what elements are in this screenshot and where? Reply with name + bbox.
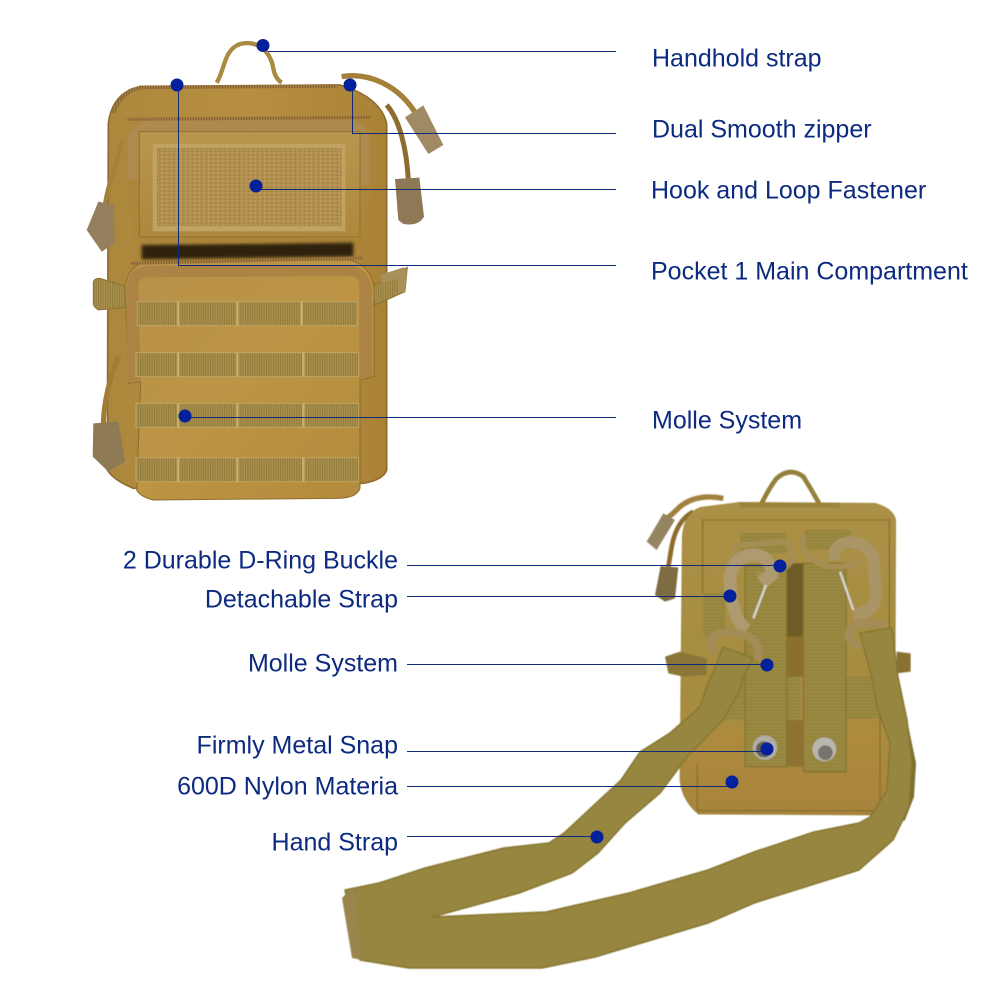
back view of pouch with strap — [342, 472, 916, 968]
side webbing loops — [93, 267, 407, 310]
callout: 600D nylon material — [177, 772, 738, 800]
callout: D-ring buckle: 2 Durable D-Ring Buckle — [123, 546, 398, 574]
hand strap — [345, 628, 912, 968]
hook and loop patch — [153, 144, 345, 231]
upper pocket with hook and loop panel — [125, 117, 372, 242]
center gap between belt straps — [787, 563, 803, 767]
strap slider buckle — [342, 887, 362, 960]
front view of pouch — [87, 43, 443, 500]
callout: firmly metal snap: Firmly Metal Snap — [197, 732, 398, 760]
callout: hook and loop fastener — [250, 176, 926, 204]
callout: handhold strap: Handhold strap — [652, 44, 822, 72]
callout: dual smooth zipper — [344, 78, 872, 144]
callout: hand strap — [272, 828, 604, 856]
back zipper pulls — [647, 497, 723, 602]
callout: molle system front — [178, 406, 802, 434]
handhold strap loop — [217, 43, 282, 83]
back top binding — [740, 503, 840, 508]
callout: detachable strap — [205, 586, 736, 614]
metal snap right — [812, 737, 836, 761]
main pouch body — [107, 85, 387, 488]
callout: dual smooth zipper: Dual Smooth zipper — [652, 116, 872, 144]
callout: pocket 1 main compartment — [170, 78, 968, 286]
callout: molle system back: Molle System — [248, 650, 398, 678]
callout: firmly metal snap — [197, 732, 774, 760]
callout: 600D nylon material: 600D Nylon Materia — [177, 772, 398, 800]
callout: molle system front: Molle System — [652, 406, 802, 434]
metal snap left — [753, 735, 777, 760]
callout: hook and loop fastener: Hook and Loop Fastener — [651, 176, 926, 204]
right zipper pull cords — [342, 76, 417, 180]
D-ring buckles — [735, 535, 860, 575]
front zipper pull tabs — [87, 105, 443, 472]
back pouch body — [680, 502, 896, 815]
belt straps with snaps — [745, 563, 846, 772]
callout: detachable strap: Detachable Strap — [205, 586, 398, 614]
back handle — [762, 472, 820, 505]
top zipper — [113, 86, 337, 113]
dark gap between pockets — [142, 243, 353, 259]
molle webbing rows — [136, 302, 359, 482]
back side loops — [665, 652, 911, 677]
callout: handhold strap — [256, 39, 822, 72]
back panel stitching outlines — [697, 520, 889, 811]
callout: D-ring buckle — [123, 546, 786, 574]
callout: pocket 1 main compartment: Pocket 1 Main Compartment — [651, 258, 968, 286]
back webbing rows — [703, 530, 880, 720]
lower pocket with molle webbing — [125, 258, 374, 500]
hand strap rear edge — [890, 683, 916, 830]
carabiner hooks — [711, 542, 885, 660]
callout: molle system back — [248, 650, 774, 678]
callout: hand strap: Hand Strap — [272, 828, 398, 856]
